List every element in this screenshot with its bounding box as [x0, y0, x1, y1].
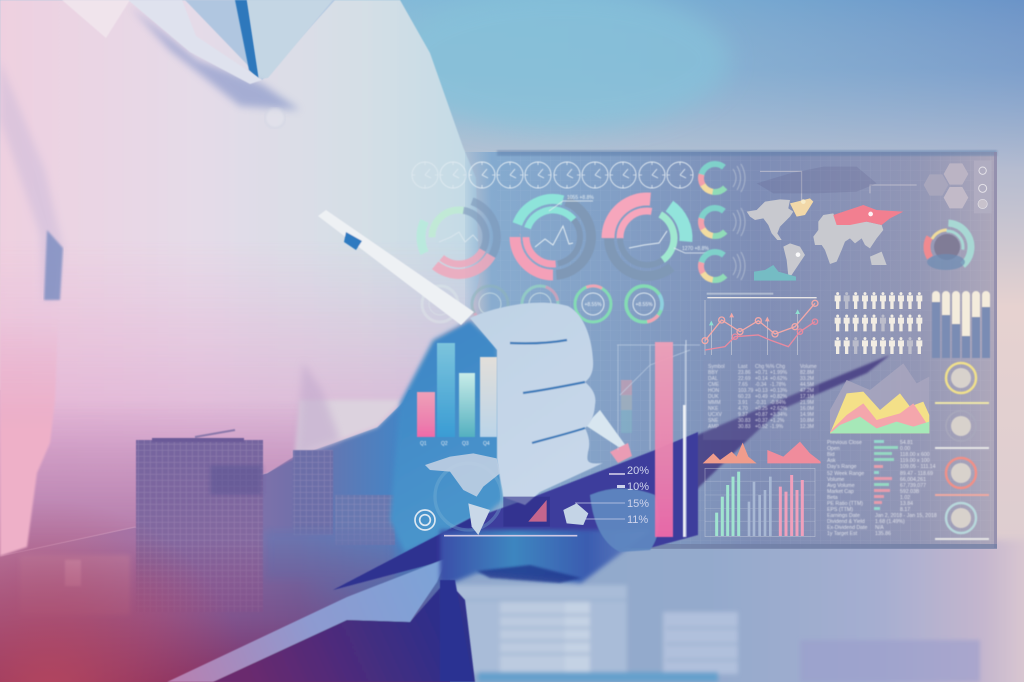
stock stats list: 52 Week Range: [827, 471, 864, 477]
stock stats list: 13.84: [900, 501, 913, 507]
stock stats list: 118.00 x 600: [900, 452, 930, 458]
stock stats list: 66,004,261: [900, 477, 926, 483]
data table: -0.84%: [770, 400, 786, 406]
stacked area chart: [830, 363, 929, 433]
shirt right of tie: [247, 0, 333, 79]
city skyline below panel: [445, 540, 1024, 682]
pen: [318, 210, 626, 448]
hand: [470, 303, 603, 505]
data table: +0.87: [755, 412, 768, 418]
data table: 4.70: [738, 406, 748, 412]
data table: +0.13: [755, 388, 768, 394]
percent labels: 15%: [627, 498, 649, 510]
data table: NKE: [708, 406, 719, 412]
stock stats list: 67,739,077: [900, 483, 926, 489]
stock stats list: Previous Close: [827, 440, 862, 446]
data table: +0.13%: [770, 388, 788, 394]
data table: Last: [738, 364, 748, 370]
line chart: [702, 293, 818, 355]
stock stats list: Earnings Date: [827, 513, 860, 519]
sleeve fold: [0, 60, 63, 300]
data table: 17.1M: [800, 394, 814, 400]
data table: UCXV: [708, 412, 723, 418]
bar chart in front of hand: Q4: [483, 441, 490, 447]
percent labels: 10%: [627, 481, 649, 493]
data table: 12.3M: [800, 424, 814, 430]
stock stats list: Ask: [827, 458, 836, 464]
stock stats list: 1.02: [900, 495, 910, 501]
stock stats list: 592.03B: [900, 489, 920, 495]
donut chart 2: 1055 +8.8%: [567, 195, 594, 201]
data table: Volume: [800, 364, 817, 370]
mini chart behind fingers: [617, 345, 700, 450]
data table: 30.83: [738, 418, 751, 424]
data table: 33.2M: [800, 376, 814, 382]
tall pink bar: [655, 340, 686, 537]
donut chart 3: 1270 +8.8%: [682, 246, 709, 252]
data table: +0.49: [755, 394, 768, 400]
data table: +0.14: [755, 376, 768, 382]
vertical progress bars: [932, 291, 990, 358]
small globe map over hand and clipboard: [415, 453, 588, 536]
data table: 60.23: [738, 394, 751, 400]
stock stats list: Volume: [827, 477, 844, 483]
stock stats list: Jan 2, 2018 - Jan 15, 2018: [875, 513, 937, 519]
data table: +0.52: [755, 424, 768, 430]
data table: 47.2M: [800, 388, 814, 394]
plum gradient at lower left: [0, 480, 450, 682]
collar shadow: [130, 6, 300, 110]
stock stats list: 109.05 - 111.14: [900, 464, 936, 470]
stock stats list: Bid: [827, 452, 835, 458]
blue area below wrist: [390, 320, 503, 552]
stock stats list: 119.00 x 100: [900, 458, 930, 464]
data table: +3.34%: [770, 412, 788, 418]
dark clipboard: [167, 432, 698, 682]
bar chart in front of hand: Q2: [441, 441, 448, 447]
data table: DAL: [708, 376, 718, 382]
data table: 10.8M: [800, 418, 814, 424]
bar chart in front of hand: Q3: [462, 441, 469, 447]
collar right: [128, 0, 262, 84]
collar left: [62, 0, 130, 38]
stock stats list: EPS (TTM): [827, 507, 853, 513]
stock stats list: 54.81: [900, 440, 913, 446]
pink pen-tip blob: [610, 443, 632, 463]
data table: -1.9%: [770, 424, 784, 430]
data table: -0.34: [755, 382, 767, 388]
shirt right panel of light fold: [295, 400, 403, 457]
button: [265, 108, 285, 128]
data table: Symbol: [708, 364, 725, 370]
data table: 82.8M: [800, 370, 814, 376]
column chart: [705, 468, 815, 537]
data table: % Chg: [770, 364, 785, 370]
small area charts: [703, 442, 821, 463]
bar chart in front of hand: [417, 343, 497, 447]
stock stats list: Avg Volume: [827, 483, 855, 489]
stock stats list: N/A: [875, 525, 884, 531]
shirt cuff: [0, 320, 58, 556]
stock stats list: Beta: [827, 495, 838, 501]
data table: 9.37: [738, 412, 748, 418]
data table: 23.86: [738, 370, 751, 376]
donut chart 1: [408, 186, 510, 288]
data table: +0.82%: [770, 394, 788, 400]
percent labels: [575, 465, 649, 526]
stock stats list: Day's Range: [827, 464, 857, 470]
small ring gauges: +8.55%: [635, 302, 653, 308]
buildings: [20, 430, 395, 615]
data table: AMP: [708, 424, 720, 430]
stock stats list: 8.17: [900, 507, 910, 513]
data table: 21.9M: [800, 400, 814, 406]
donut chart 3: [593, 184, 709, 292]
small ring gauges: +8.55%: [584, 302, 602, 308]
world map: [747, 167, 917, 281]
data table: +0.62%: [770, 376, 788, 382]
data table: +1.99%: [770, 370, 788, 376]
gauge donut near map: [920, 220, 974, 274]
data table: Chg %: [755, 364, 771, 370]
data table: 7.65: [738, 382, 748, 388]
bar chart in front of hand: Q1: [420, 441, 427, 447]
data table: HON: [708, 388, 720, 394]
data table: 30.83: [738, 424, 751, 430]
data table: 14.9M: [800, 412, 814, 418]
data table: 44.5M: [800, 382, 814, 388]
stock stats list: [827, 440, 937, 537]
data table: 103.79: [738, 388, 754, 394]
shirt: [0, 0, 480, 556]
percent labels: 20%: [627, 465, 649, 477]
clock row: [412, 162, 693, 188]
data table: 22.69: [738, 376, 751, 382]
data table: +2.62%: [770, 406, 788, 412]
data table: BBY: [708, 370, 719, 376]
small donut stack: [695, 158, 745, 286]
data table: +0.37: [755, 418, 768, 424]
stock stats list: 135.86: [875, 531, 891, 537]
stock stats list: 89.47 - 118.69: [900, 471, 933, 477]
stock stats list: Dividend & Yield: [827, 519, 865, 525]
data table: -0.31: [755, 400, 767, 406]
stock stats list: Ex-Dividend Date: [827, 525, 867, 531]
stock stats list: PE Ratio (TTM): [827, 501, 863, 507]
data table: -1.78%: [770, 382, 786, 388]
stock stats list: 1.68 (1.49%): [875, 519, 905, 525]
data table: DUK: [708, 394, 719, 400]
lower left city base: [0, 390, 450, 682]
data table: [703, 360, 819, 440]
stock stats list: Open: [827, 446, 840, 452]
stock stats list: 0.00: [900, 446, 910, 452]
data table: +0.25: [755, 406, 768, 412]
dial gauges: [935, 363, 989, 539]
hexagons and tool bar: [924, 161, 992, 213]
people pictogram: [835, 292, 922, 354]
donut chart 2: [504, 188, 602, 286]
data table: +1.2%: [770, 418, 785, 424]
data table: CME: [708, 382, 720, 388]
dark chest fold: [295, 362, 340, 457]
stock stats list: Market Cap: [827, 489, 854, 495]
small ring gauges: [422, 279, 669, 329]
dashboard panel: [465, 150, 997, 549]
stock stats list: 1y Target Est: [827, 531, 858, 537]
translucent clipboard band: [690, 355, 890, 535]
data table: 3.91: [738, 400, 748, 406]
data table: 16.0M: [800, 406, 814, 412]
data table: SNE: [708, 418, 719, 424]
data table: MMM: [708, 400, 720, 406]
percent labels: 11%: [627, 514, 648, 526]
neck opening: [185, 0, 335, 80]
data table: +0.71: [755, 370, 768, 376]
tie: [235, 0, 259, 79]
